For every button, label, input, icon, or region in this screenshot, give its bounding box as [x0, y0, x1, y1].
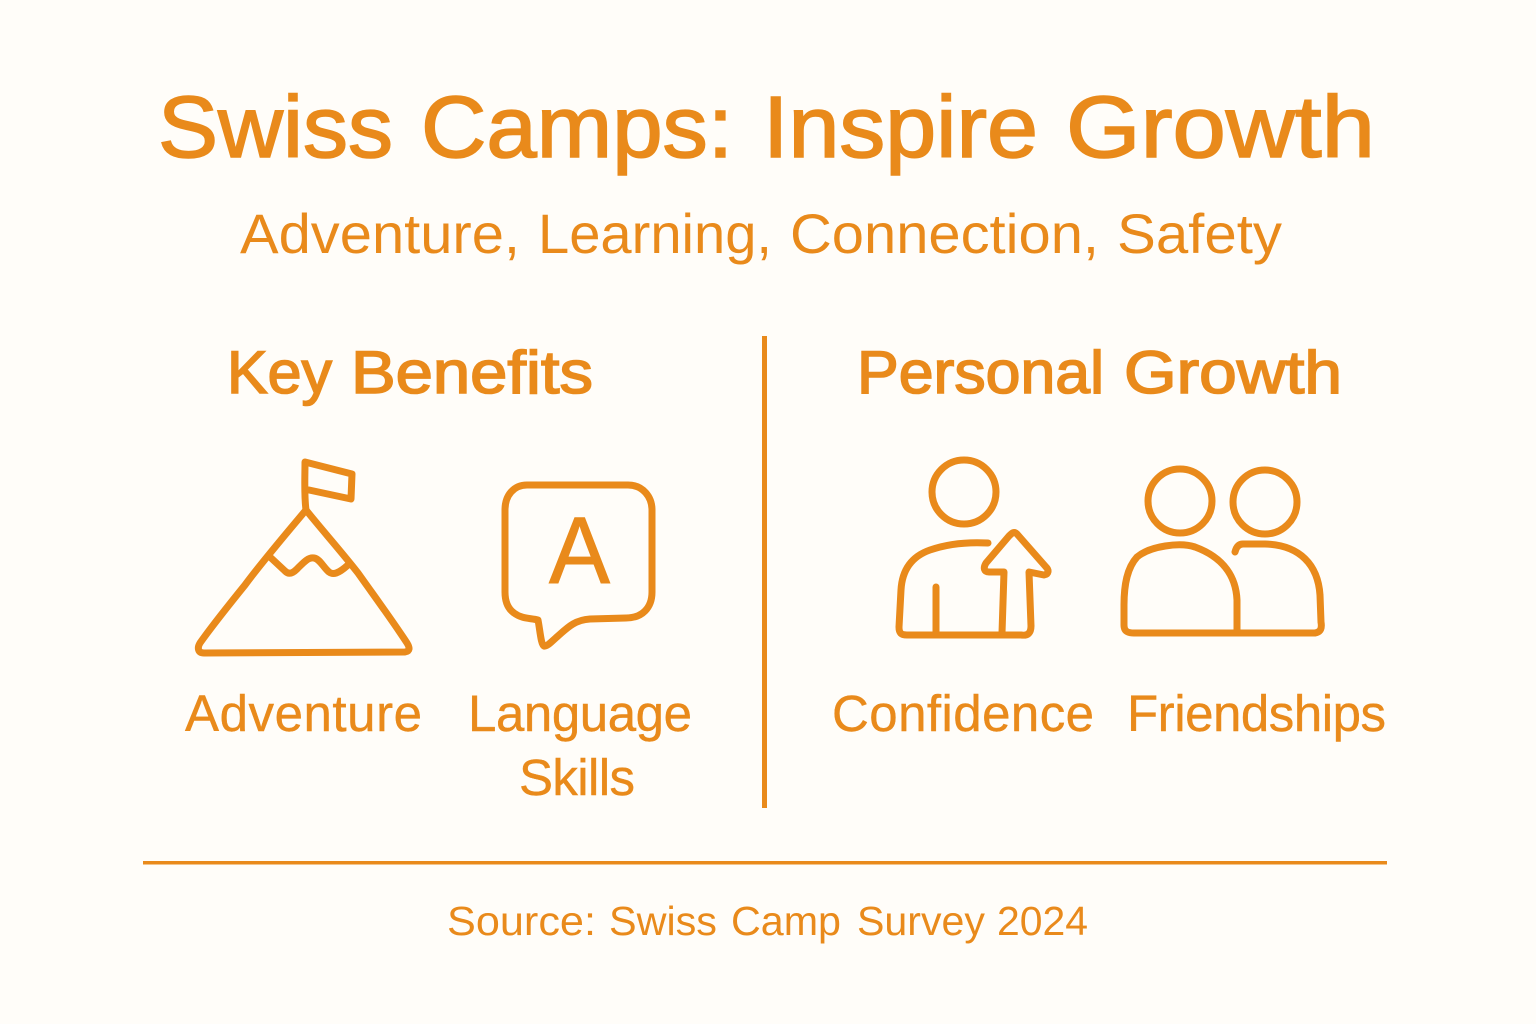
- title: Swiss: [158, 79, 393, 176]
- source note: Source:: [447, 898, 596, 944]
- subtitle: [240, 202, 1282, 265]
- label: language skills: [468, 685, 692, 806]
- vertical divider: [762, 336, 767, 808]
- horizontal divider: [143, 861, 1387, 864]
- heading: key benefits: Key: [227, 339, 332, 406]
- source note: Survey: [857, 898, 985, 944]
- heading: personal growth: Personal: [857, 339, 1104, 406]
- subtitle: Safety: [1117, 202, 1282, 265]
- icon: two friends: [1124, 469, 1321, 633]
- icon: speech bubble with letter A: A: [549, 498, 611, 604]
- source note: [447, 898, 1088, 944]
- heading: key benefits: Benefits: [351, 339, 593, 406]
- source note: Camp: [731, 898, 841, 944]
- icon: person with up arrow: [899, 460, 1048, 635]
- icon: speech bubble with letter A: [505, 485, 652, 646]
- icon: mountain with flag: [198, 462, 409, 653]
- title: [158, 79, 1375, 176]
- source note: Swiss: [609, 898, 717, 944]
- subtitle: Adventure,: [240, 202, 520, 265]
- title: Camps:: [421, 79, 733, 176]
- subtitle: Connection,: [790, 202, 1099, 265]
- label: friendships: Friendships: [1127, 685, 1386, 742]
- label: adventure: Adventure: [185, 685, 422, 742]
- title: Inspire: [763, 79, 1038, 176]
- source note: 2024: [997, 898, 1088, 944]
- label: confidence: Confidence: [832, 685, 1094, 742]
- subtitle: Learning,: [538, 202, 772, 265]
- label: language skills: Language: [468, 685, 692, 742]
- heading: personal growth: Growth: [1124, 339, 1342, 406]
- label: language skills: Skills: [519, 749, 635, 806]
- heading: key benefits: [227, 339, 593, 406]
- title: Growth: [1066, 79, 1375, 176]
- heading: personal growth: [857, 339, 1342, 406]
